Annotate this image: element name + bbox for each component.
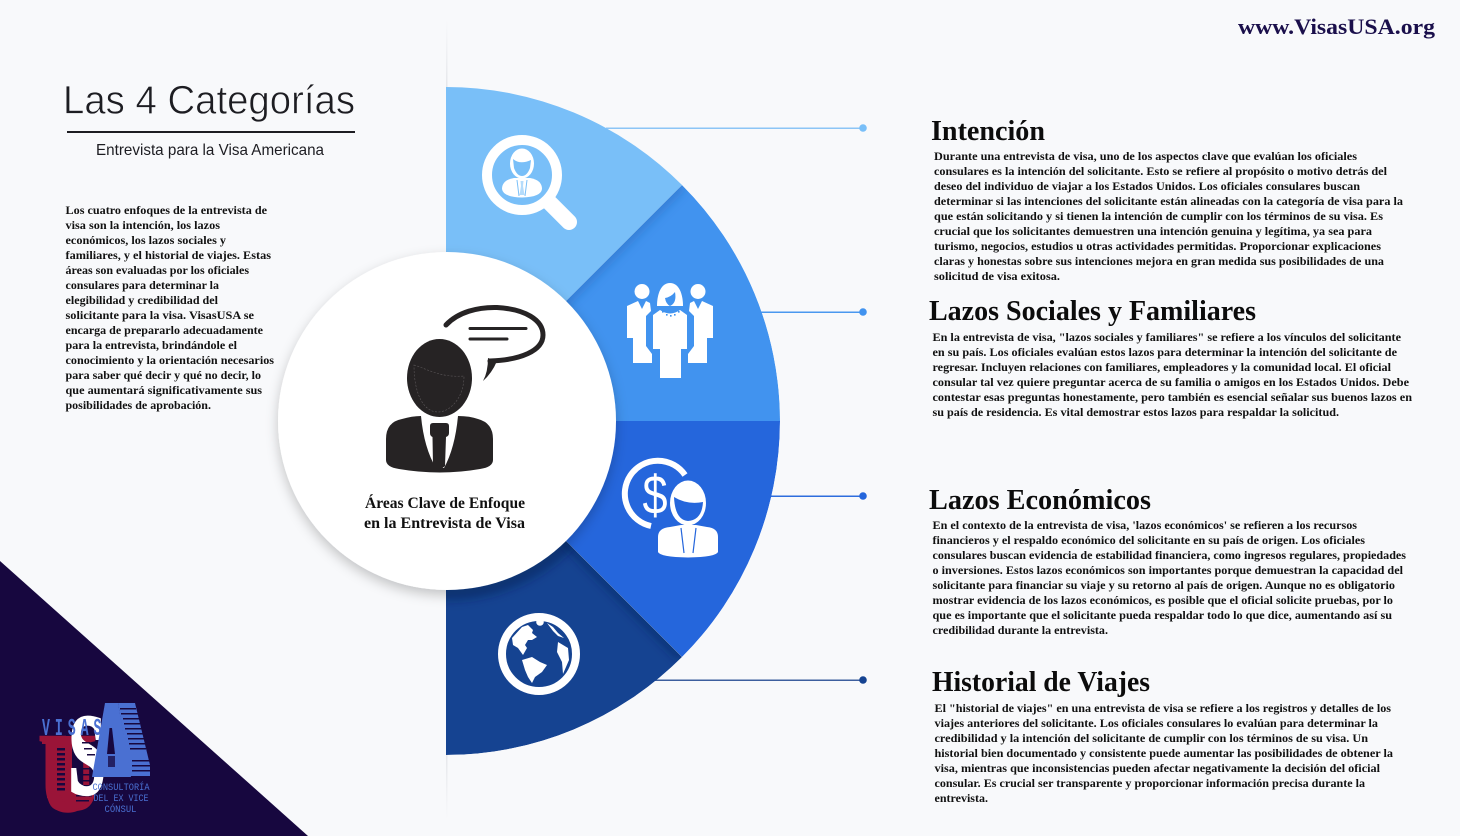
intro text block: [66, 204, 275, 412]
intro text block: encarga de prepararlo adecuadamente: [66, 324, 263, 337]
body text: que están solicitando y si tienen la intención de cumplir con los términos de su visa. Es: [934, 210, 1384, 223]
body text: o inversiones. Estos lazos económicos son importantes porque demuestran la capacidad del: [932, 564, 1404, 577]
body text: turismo, negocios, estudios u otras actividades permitidas. Proporcionar explicaciones: [934, 240, 1382, 253]
title: Las 4 Categorías: [63, 78, 355, 122]
body text: consular. Es crucial ser transparente y proporcionar información precisa durante la: [934, 777, 1365, 790]
body text: consulares buscan evidencia de estabilidad financiera, como ingresos regulares, propiedades: [932, 549, 1406, 562]
corner triangle: [0, 561, 308, 836]
intro text block: posibilidades de aprobación.: [66, 399, 211, 412]
logo letter U: U: [38, 711, 97, 836]
connector: lazos sociales: [760, 308, 867, 316]
intro text block: para saber qué decir y qué no decir, lo: [66, 369, 261, 382]
body text: En la entrevista de visa, "lazos sociales y familiares" se refiere a los vínculos del solicitante: [932, 331, 1401, 344]
body text: En el contexto de la entrevista de visa, 'lazos económicos' se refieren a los recursos: [932, 519, 1358, 532]
heading: Intención: [931, 116, 1045, 147]
speech bubble: [446, 307, 543, 381]
segment: historial de viajes: [446, 541, 682, 755]
intro text block: elegibilidad y credibilidad del: [66, 294, 219, 307]
body text: que es importante que el solicitante pueda respaldar todo lo que dice, aumentando así su: [932, 609, 1393, 622]
intro text block: que aumentará significativamente sus: [66, 384, 263, 397]
icon: money and person: $: [642, 464, 668, 526]
logo tagline: DEL EX VICE: [94, 793, 148, 805]
icon: globe: [502, 617, 576, 691]
subtitle: Entrevista para la Visa Americana: [96, 142, 324, 159]
body text: deseo del individuo de viajar a los Estados Unidos. Los oficiales consulares buscan: [934, 180, 1361, 193]
body text: historial bien documentado y consistente puede aumentar las posibilidades de obtener la: [934, 747, 1393, 760]
logo wordmark visas: VISAS: [42, 715, 106, 742]
connector: lazos económicos: [760, 492, 867, 500]
body text: viajes anteriores del solicitante. Los oficiales consulares lo evalúan para determinar la: [934, 717, 1378, 730]
intro text block: áreas son evaluadas por los oficiales: [66, 264, 250, 277]
body text: entrevista.: [934, 792, 988, 805]
section: intención: [931, 116, 1403, 283]
website url: www.VisasUSA.org: [1238, 14, 1436, 39]
center circle: [278, 252, 616, 590]
body text: credibilidad y la intención del solicitante de cumplir con los términos de su visa. Un: [934, 732, 1369, 745]
heading: Historial de Viajes: [932, 667, 1150, 698]
center label: en la Entrevista de Visa: [364, 515, 525, 532]
body text: credibilidad durante la entrevista.: [932, 624, 1108, 637]
heading: Lazos Económicos: [929, 485, 1151, 516]
intro text block: visa son la intención, los lazos: [66, 219, 221, 232]
intro text block: familiares, y el historial de viajes. Estas: [66, 249, 272, 262]
icon: magnifier with person: [487, 140, 569, 222]
body text: [934, 150, 1403, 283]
intro text block: económicos, los lazos sociales y: [66, 234, 226, 247]
segment: intención: [446, 87, 682, 421]
logo: [38, 692, 150, 836]
body text: [932, 519, 1406, 637]
logo letter S: S: [69, 692, 105, 818]
title block: [63, 78, 355, 159]
body text: Durante una entrevista de visa, uno de los aspectos clave que evalúan los oficiales: [934, 150, 1358, 163]
body text: regresar. Incluyen relaciones con familiares, empleadores y la comunidad local. El oficial: [932, 361, 1392, 374]
semicircle chart: [446, 87, 780, 755]
icon: speaking person: [386, 307, 543, 472]
intro text block: conocimiento y la orientación necesarios: [66, 354, 275, 367]
body text: El "historial de viajes" en una entrevista de visa se refiere a los registros y detalles de los: [934, 702, 1391, 715]
center label: Áreas Clave de Enfoque: [365, 495, 525, 512]
connector: intención: [606, 124, 867, 132]
body text: financieros y el respaldo económico del solicitante en su país de origen. Los oficiales: [932, 534, 1366, 547]
body text: consular tal vez quiere preguntar acerca de su familia o amigos en los Estados Unidos. Debe: [932, 376, 1409, 389]
heading: Lazos Sociales y Familiares: [929, 296, 1256, 327]
intro text block: Los cuatro enfoques de la entrevista de: [66, 204, 267, 217]
section: lazos sociales y familiares: [929, 296, 1413, 419]
segment: lazos económicos: [566, 421, 780, 657]
body text: crucial que los solicitantes demuestren una intención genuina y legítima, ya sea para: [934, 225, 1372, 238]
body text: claras y honestas sobre sus intenciones mejora en gran medida sus posibilidades de una: [934, 255, 1384, 268]
intro text block: solicitante para la visa. VisasUSA se: [66, 309, 254, 322]
body text: su país de residencia. Es vital demostrar estos lazos para respaldar la solicitud.: [932, 406, 1339, 419]
section: historial de viajes: [932, 667, 1393, 805]
section: lazos económicos: [929, 485, 1406, 637]
body text: mostrar evidencia de los lazos económicos, es posible que el oficial solicite pruebas, por lo: [932, 594, 1393, 607]
logo letter A with striped shadow: [92, 703, 150, 777]
icon: family group: [627, 283, 713, 378]
connector: historial: [655, 676, 867, 684]
body text: [934, 702, 1393, 805]
logo tagline: [92, 780, 150, 816]
body text: solicitante para financiar su viaje y su retorno al país de origen. Aunque no es obligatorio: [932, 579, 1395, 592]
logo tagline: CONSULTORÍA: [92, 780, 150, 794]
body text: solicitud de visa exitosa.: [934, 270, 1060, 283]
logo tagline: CÓNSUL: [104, 802, 136, 816]
intro text block: para la entrevista, brindándole el: [66, 339, 238, 352]
body text: [932, 331, 1413, 419]
body text: visa, mientras que inconsistencias pueden afectar negativamente la decisión del oficial: [934, 762, 1381, 775]
body text: contestar esas preguntas honestamente, pero también es esencial señalar sus buenos lazos en: [932, 391, 1413, 404]
body text: en su país. Los oficiales evalúan estos lazos para determinar la intención del solicitante de: [932, 346, 1397, 359]
body text: determinar si las intenciones del solicitante están alineadas con la categoría de visa para la: [934, 195, 1403, 208]
intro text block: consulares para determinar la: [66, 279, 219, 292]
segment: lazos sociales: [566, 185, 780, 421]
center label: [364, 495, 525, 532]
icon: money and person: [625, 461, 718, 558]
body text: consulares es la intención del solicitante. Esto se refiere al propósito o motivo detrás del: [934, 165, 1388, 178]
